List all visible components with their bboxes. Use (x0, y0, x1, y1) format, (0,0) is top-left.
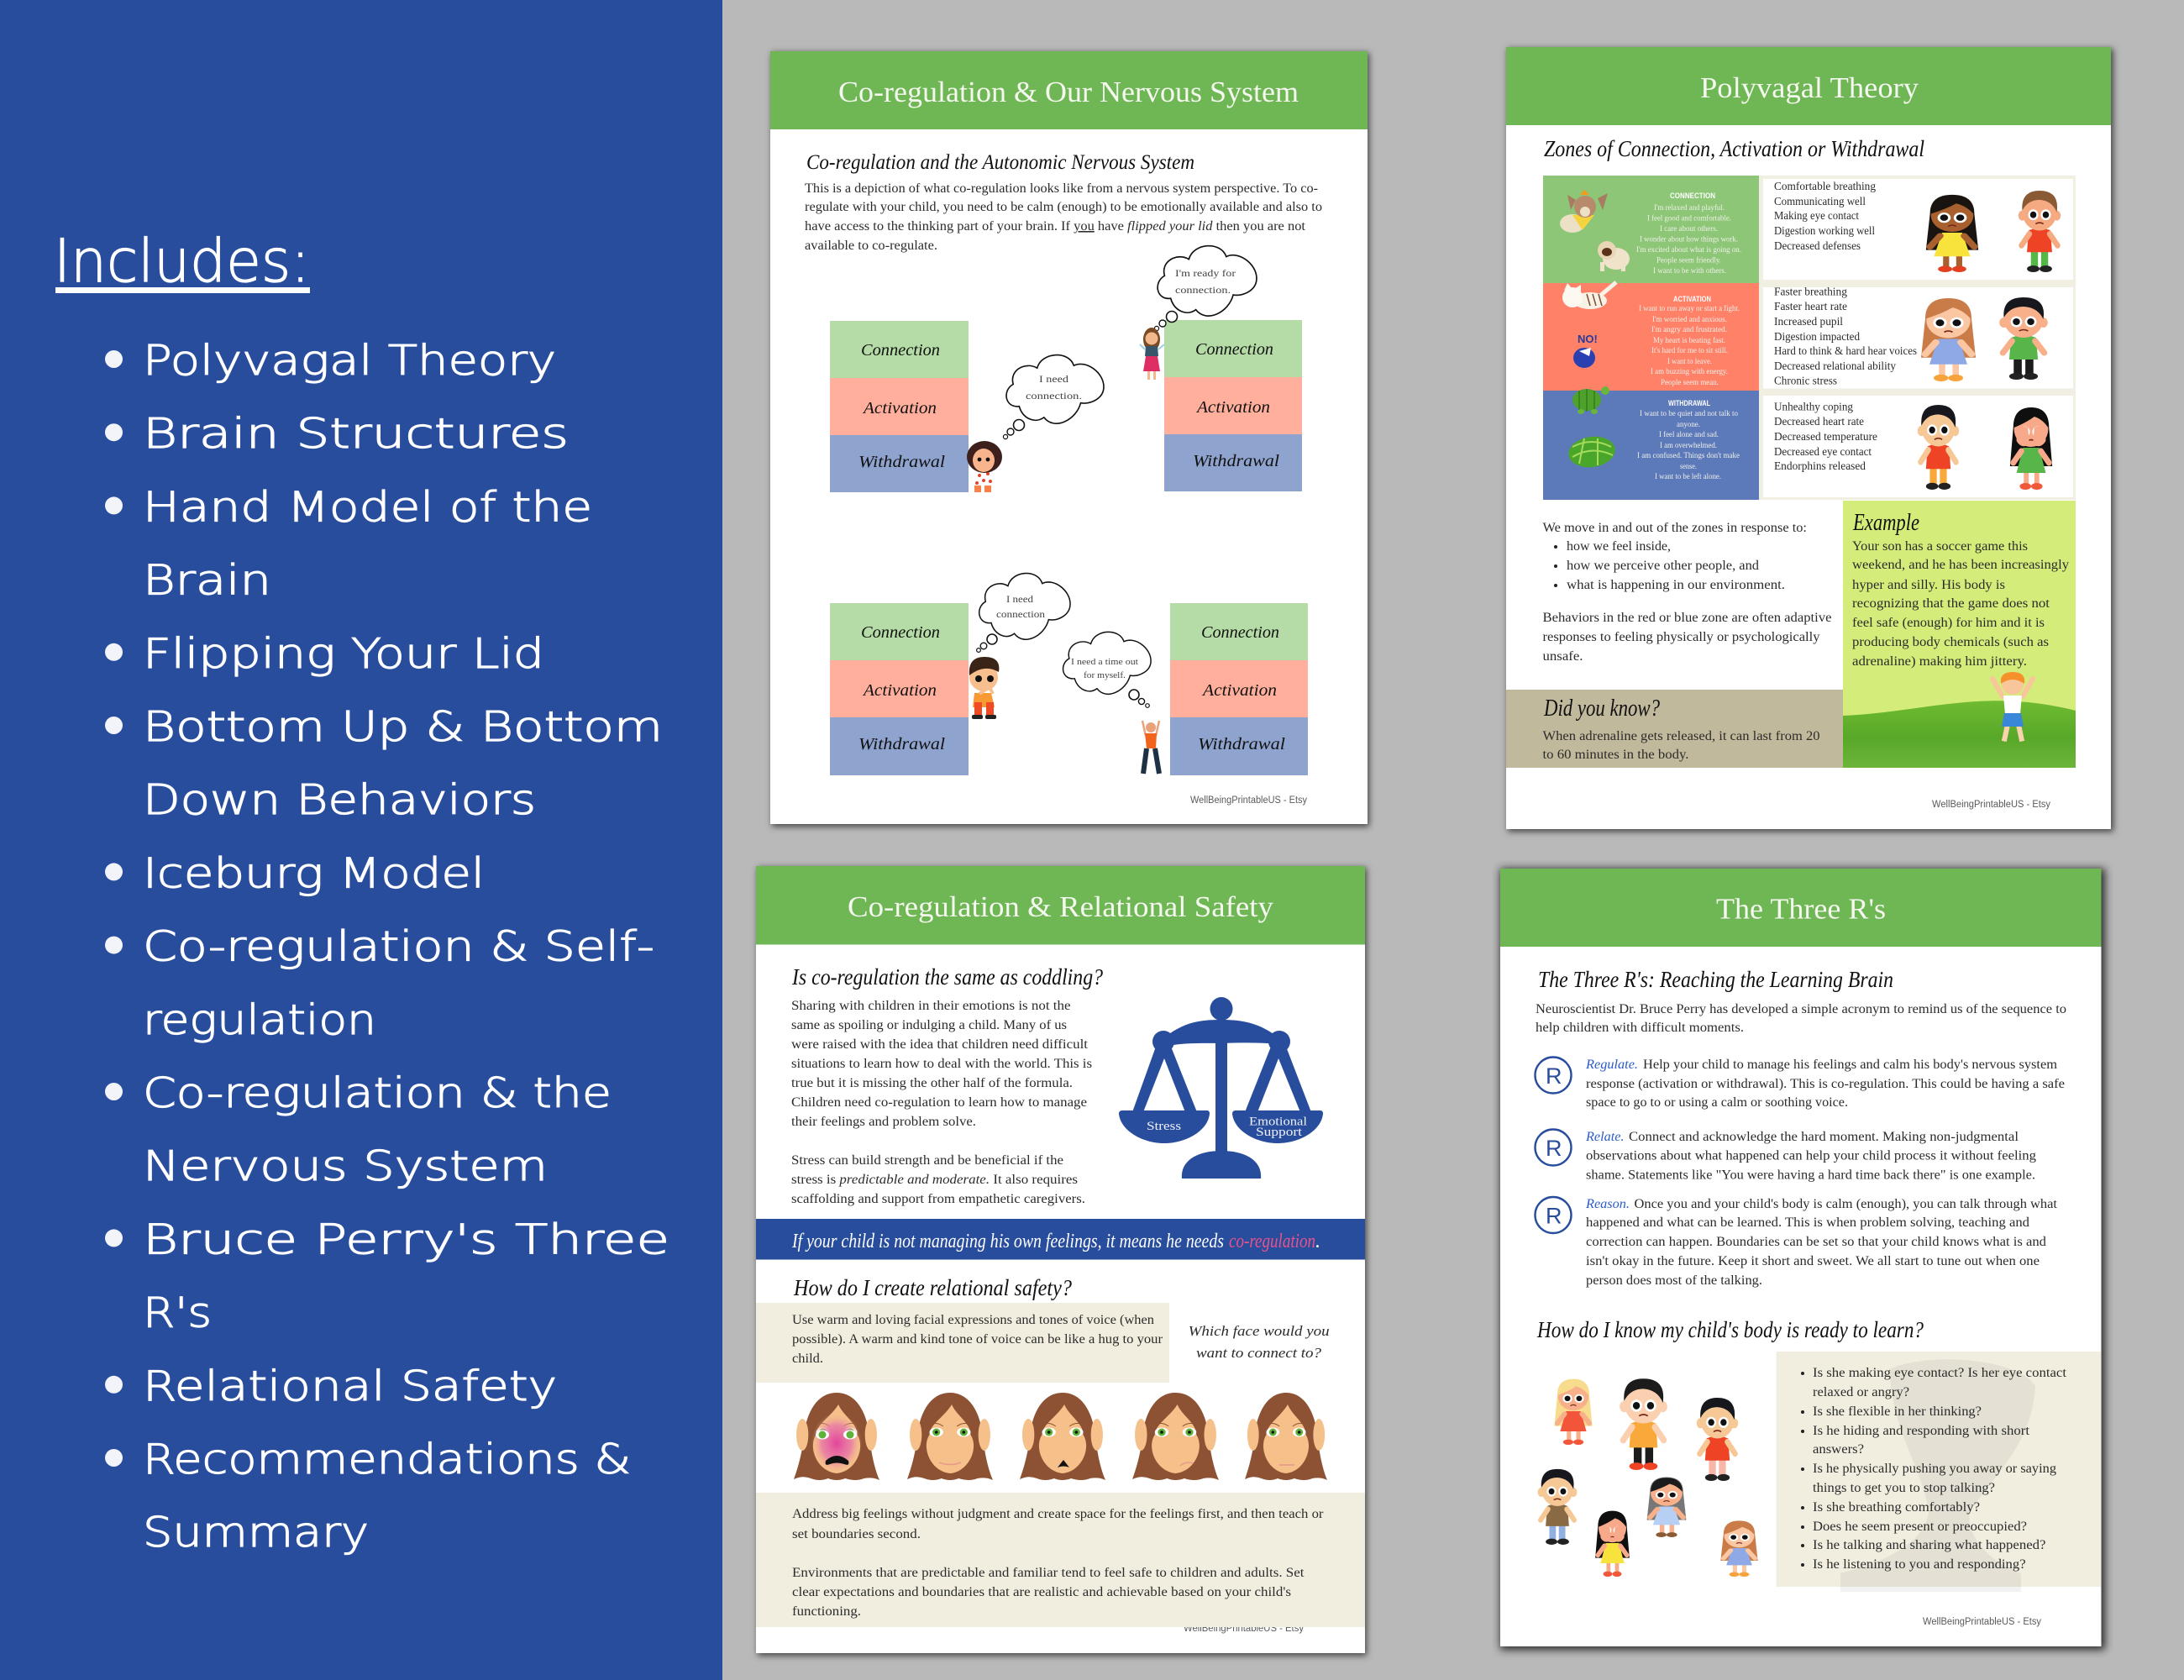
thought bubble: I need connection: I need (1006, 595, 1033, 605)
page title: Polyvagal Theory (1700, 71, 1919, 104)
readiness checklist box: Is he hiding and responding with short (1813, 1424, 2030, 1438)
zone panel: withdrawal: WITHDRAWAL (1668, 399, 1710, 408)
thought bubble: I'm ready for connection.: I'm ready for (1175, 269, 1236, 279)
question: which face (1189, 1323, 1330, 1361)
bullet list: Nervous System (143, 1142, 548, 1190)
zone panel: activation: It's hard for me to sit still. (1651, 346, 1728, 354)
zone stack: child activated: Withdrawal (858, 735, 945, 753)
bullet list: R's (143, 1289, 212, 1337)
readiness checklist box: things to get you to stop talking? (1813, 1481, 1995, 1495)
section heading: The Three R's: Reaching the Learning Brain (1538, 967, 1893, 992)
item: Regulate: R (1546, 1063, 1562, 1089)
readiness checklist box: relaxed or angry? (1813, 1385, 1909, 1399)
zone panel: activation: ACTIVATION (1673, 295, 1711, 304)
coddling paragraph: were raised with the idea that children need difficult (791, 1037, 1089, 1052)
icon: balance scale: Support (1256, 1126, 1303, 1139)
closing guidance box: Address big feelings without judgment and create space for the feelings first, and then teach or (792, 1507, 1324, 1521)
face: smirking (1132, 1393, 1219, 1480)
zone stack: adult withdrawn: Connection (1201, 623, 1279, 642)
bullet list: Down Behaviors (143, 776, 536, 824)
readiness checklist box: Is she breathing comfortably? (1813, 1500, 1980, 1515)
icon: balance scale (1119, 997, 1323, 1179)
readiness checklist box (1776, 1352, 2101, 1592)
withdrawal signs list: Unhealthy coping (1774, 401, 1853, 413)
zone panel: withdrawal (1543, 391, 1759, 500)
item: Reason: isn't okay in the future. Keep it short and sweet. We all start to tune out when one (1586, 1254, 2040, 1268)
zone stack: child activated (830, 603, 969, 775)
zone panel: connection: I feel good and comfortable. (1647, 213, 1731, 222)
bullet list: Relational Safety (143, 1362, 557, 1410)
character: woman in pink skirt (1140, 328, 1164, 380)
callout: example (1843, 501, 2076, 768)
zones explanation text: what is happening in our environment. (1567, 578, 1785, 592)
bullet list (105, 337, 669, 1557)
connection signs list: Digestion working well (1774, 224, 1875, 237)
zone panel: connection: I want to be with others. (1653, 266, 1726, 275)
icon: turtle shell (1567, 433, 1617, 470)
bullet list: Flipping Your Lid (143, 630, 544, 678)
relational safety tip box: possible). A warm and kind tone of voice can be like a hug to your (792, 1332, 1163, 1347)
zones explanation text: We move in and out of the zones in response to: (1542, 521, 1807, 535)
callout: example: recognizing that the game does not (1852, 596, 2050, 611)
bullet list: Summary (143, 1509, 369, 1557)
thought bubble: I need a time out for myself.: I need a time out (1071, 658, 1138, 667)
zones explanation text (1542, 521, 1832, 664)
key message band: co-regulation (1229, 1231, 1315, 1252)
coddling paragraph: Sharing with children in their emotions is not the (791, 999, 1071, 1013)
bullet list: Co-regulation & the (143, 1069, 612, 1117)
zone panel: activation: My heart is beating fast. (1653, 336, 1725, 344)
coddling paragraph: scaffolding and support from empathetic caregivers. (791, 1192, 1085, 1206)
callout: did you know (1506, 690, 1843, 768)
readiness checklist box: Does he seem present or preoccupied? (1813, 1520, 2027, 1534)
bullet list: Co-regulation & Self- (143, 923, 654, 971)
item: Regulate: space to go to or using a calm or soothing voice. (1586, 1095, 1848, 1110)
readiness checklist box: Is he talking and sharing what happened? (1813, 1538, 2046, 1552)
closing guidance box (756, 1493, 1365, 1627)
question: which face: want to connect to? (1196, 1345, 1322, 1361)
footer credit: WellBeingPrintableUS - Etsy (1923, 1617, 2041, 1627)
item: Regulate: response (activation or withdrawal). This is co-regulation. This could be having a safe (1586, 1077, 2065, 1091)
key message band: If your child is not managing his own feelings, it means he needs (791, 1231, 1224, 1252)
intro paragraph: help children with difficult moments. (1536, 1021, 1744, 1035)
zone panel: activation: I want to leave. (1667, 357, 1712, 365)
zone stack: child needs connection: Activation (862, 399, 937, 417)
activation signs list: Faster heart rate (1774, 300, 1847, 312)
coddling paragraph: Children need co-regulation to learn how to manage (791, 1095, 1087, 1110)
intro paragraph: regulate with your child, you need to be calm (enough) to be emotionally available and also to (805, 200, 1322, 214)
callout: example: Your son has a soccer game this (1852, 539, 2028, 554)
activation signs list: Increased pupil (1774, 315, 1843, 328)
zone panel: withdrawal: sense. (1680, 462, 1697, 470)
zone stack: adult ready for connection: Activation (1195, 398, 1270, 417)
panel: The Three R's page (1500, 869, 2105, 1650)
icon: pug (1598, 241, 1630, 271)
bullet list: Hand Model of the (143, 483, 592, 531)
connection signs list (1774, 180, 1876, 252)
zone panel: withdrawal: anyone. (1677, 420, 1700, 428)
closing guidance box: set boundaries second. (792, 1527, 921, 1541)
zone stack: child activated: Activation (862, 681, 937, 700)
thought bubble: I need a time out for myself.: for myself. (1084, 671, 1126, 680)
question: which face: Which face would you (1189, 1323, 1330, 1339)
zone panel: connection: I'm relaxed and playful. (1654, 203, 1725, 212)
withdrawal signs list: Endorphins released (1774, 459, 1866, 472)
icon: cat (1562, 282, 1616, 309)
grass hill (1843, 701, 2076, 768)
footer credit: WellBeingPrintableUS - Etsy (1932, 800, 2050, 810)
withdrawal signs list (1774, 401, 1877, 472)
bullet list: regulation (143, 996, 376, 1044)
footer credit: WellBeingPrintableUS - Etsy (1190, 795, 1307, 806)
item: Relate: observations about what happened can help your child process it without feeling (1586, 1149, 2036, 1163)
connection signs list: Decreased defenses (1774, 239, 1861, 252)
closing guidance box: functioning. (792, 1604, 861, 1619)
character: girl in polka dots (967, 441, 1002, 492)
readiness checklist box: Is she making eye contact? Is her eye contact (1813, 1366, 2067, 1380)
readiness checklist box: Is he physically pushing you away or saying (1813, 1462, 2056, 1476)
bullet list: Recommendations & (143, 1436, 631, 1483)
zone stack: child needs connection (830, 321, 969, 492)
thought bubble: I need connection.: connection. (1026, 391, 1082, 402)
icon: blue cat saying NO (1573, 333, 1598, 368)
face: shocked (1020, 1393, 1105, 1480)
bullet list: Polyvagal Theory (143, 337, 556, 385)
thought bubble: I need connection. (1003, 355, 1104, 439)
withdrawal signs list: Decreased eye contact (1774, 445, 1872, 458)
zones explanation text: responses to feeling physically or psychologically (1542, 630, 1820, 644)
relational safety tip box (756, 1303, 1169, 1383)
children illustration group (1538, 1378, 1758, 1577)
symptoms frame (1759, 176, 2076, 500)
watermark: tornado (1840, 1359, 2035, 1592)
coddling paragraph: their feelings and problem solve. (791, 1115, 976, 1129)
zone panel: activation: I'm worried and anxious. (1652, 315, 1727, 323)
callout: example: producing body chemicals (such as (1852, 635, 2049, 649)
section heading: How do I know my child's body is ready to learn? (1536, 1317, 1924, 1342)
item: Regulate (1536, 1057, 2065, 1110)
face: smiling (907, 1393, 993, 1480)
thought bubble: I'm ready for connection. (1154, 246, 1257, 331)
item: Relate: Connect and acknowledge the hard moment. Making non-judgmental (1629, 1130, 2019, 1144)
intro paragraph: This is a depiction of what co-regulation looks like from a nervous system perspective. To co- (805, 181, 1318, 196)
callout: did you know: to 60 minutes in the body. (1542, 748, 1688, 762)
zone stack: adult ready for connection (1164, 320, 1302, 491)
item: Reason: person does most of the talking. (1586, 1273, 1762, 1288)
withdrawal signs list: Decreased heart rate (1774, 415, 1864, 428)
item: Reason: R (1546, 1203, 1562, 1228)
section heading: How do I create relational safety? (793, 1275, 1072, 1300)
item: Reason: Reason. (1585, 1197, 1630, 1211)
coddling paragraph: true but it is missing the other half of the formula. (791, 1076, 1073, 1090)
zone panel: connection: I'm excited about what is going on. (1636, 245, 1741, 254)
zone panel: connection: CONNECTION (1670, 192, 1715, 201)
closing guidance box: Environments that are predictable and familiar tend to feel safe to children and adults. Set (792, 1566, 1305, 1580)
activation signs list (1774, 286, 1917, 386)
zone panel: withdrawal: I want to be left alone. (1655, 472, 1721, 480)
panel: Co-regulation & Our Nervous System page (770, 51, 1369, 827)
readiness checklist box: Is he listening to you and responding? (1813, 1557, 2026, 1572)
coddling paragraph: Stress can build strength and be beneficial if the (791, 1153, 1063, 1168)
item: Reason (1536, 1197, 2058, 1288)
thought bubble: I need connection.: I need (1039, 375, 1068, 385)
icon: balance scale: Stress (1147, 1120, 1181, 1133)
connection signs list: Making eye contact (1774, 209, 1859, 222)
item: Regulate: Help your child to manage his feelings and calm his body's nervous system (1643, 1058, 2057, 1072)
bullet list: Bottom Up & Bottom (143, 703, 663, 751)
section heading: Co-regulation and the Autonomic Nervous System (806, 151, 1194, 174)
thought bubble: I need connection (977, 574, 1070, 652)
character: boy with sunglasses (969, 657, 999, 719)
intro paragraph: available to co-regulate. (805, 239, 937, 253)
coddling paragraph: same as spoiling or indulging a child. Many of us (791, 1018, 1067, 1032)
callout: example: feel safe (enough) for him and it is (1852, 616, 2045, 630)
icon: dog (1560, 190, 1608, 233)
zone panel: withdrawal: I am confused. Things don't make (1637, 451, 1740, 459)
zone stack: adult ready for connection: Connection (1195, 340, 1273, 359)
closing guidance box: clear expectations and boundaries that are realistic and achievable based on your child's (792, 1585, 1291, 1599)
zone panel: withdrawal: I am overwhelmed. (1660, 441, 1717, 449)
activation signs list: Faster breathing (1774, 286, 1847, 297)
zones explanation text: how we perceive other people, and (1567, 559, 1759, 573)
zone panel: connection: People seem friendly. (1656, 255, 1721, 264)
item: Relate: R (1546, 1136, 1562, 1161)
heading: Includes: Includes: (54, 227, 310, 296)
zone panel: activation: People seem mean. (1661, 378, 1719, 386)
thought bubble: I need connection: connection (996, 610, 1045, 620)
zone panel: connection (1543, 176, 1759, 283)
page title: The Three R's (1716, 892, 1886, 926)
zone stack: adult withdrawn: Activation (1201, 681, 1277, 700)
zone panel: connection: I wonder about how things work. (1640, 235, 1738, 244)
zones explanation text: Behaviors in the red or blue zone are often adaptive (1542, 611, 1832, 625)
panel: Co-regulation & Relational Safety page (756, 866, 1367, 1656)
bullet list: Iceburg Model (143, 849, 485, 897)
activation signs list: Decreased relational ability (1774, 360, 1896, 372)
coddling paragraph (791, 999, 1092, 1206)
callout: example: Example (1852, 509, 1919, 536)
item: Relate: shame. Statements like "You were having a hard time back there" is one example. (1586, 1168, 2035, 1183)
bullet list: Bruce Perry's Three (143, 1215, 669, 1263)
zone stack: adult withdrawn (1170, 603, 1308, 775)
zone panel: withdrawal: I want to be quiet and not talk to (1640, 409, 1738, 417)
connection signs list: Comfortable breathing (1774, 180, 1876, 192)
intro paragraph: Neuroscientist Dr. Bruce Perry has developed a simple acronym to remind us of the sequence to (1536, 1002, 2066, 1016)
zone panel: activation: I am buzzing with energy. (1651, 367, 1728, 375)
item: Relate (1536, 1129, 2036, 1183)
page title: Co-regulation & Our Nervous System (838, 76, 1299, 108)
callout: did you know: Did you know? (1543, 695, 1660, 722)
readiness checklist box: Is she flexible in her thinking? (1813, 1404, 1982, 1419)
panel: includes list (0, 0, 722, 1680)
zone stack: child needs connection: Connection (861, 341, 940, 360)
zone panel: withdrawal: I feel alone and sad. (1659, 430, 1719, 438)
zone stack: adult withdrawn: Withdrawal (1198, 735, 1285, 753)
coddling paragraph: situations to learn how to deal with the world. This is (791, 1057, 1092, 1071)
key message band: . (1315, 1231, 1320, 1252)
icon: blue cat saying NO: NO! (1578, 333, 1598, 345)
faces row (794, 1393, 1327, 1480)
key message band (756, 1219, 1365, 1260)
intro paragraph: have access to the thinking part of your brain. If you have flipped your lid then you are not (805, 219, 1306, 234)
zone panel: activation: I'm angry and frustrated. (1651, 325, 1727, 333)
page title: Co-regulation & Relational Safety (848, 890, 1274, 923)
zones explanation text: how we feel inside, (1567, 539, 1671, 554)
icon: balance scale: Emotional (1249, 1116, 1307, 1129)
relational safety tip box: child. (792, 1352, 823, 1366)
item: Reason: happened and what can be learned. This is when problem solving, teaching and (1586, 1215, 2029, 1230)
zone stack: child needs connection: Withdrawal (858, 453, 945, 471)
readiness checklist box: answers? (1813, 1442, 1864, 1457)
face: angry (794, 1393, 879, 1480)
section heading: Zones of Connection, Activation or Withdrawal (1544, 136, 1924, 161)
relational safety tip box: Use warm and loving facial expressions and tones of voice (when (792, 1313, 1154, 1327)
item: Reason: Once you and your child's body is calm (enough), you can talk through what (1635, 1197, 2058, 1211)
face: neutral (1245, 1393, 1327, 1480)
thought bubble: I need a time out for myself. (1063, 632, 1151, 707)
callout: did you know: When adrenaline gets released, it can last from 20 (1542, 729, 1820, 743)
zone panel: activation: I want to run away or start a fight. (1639, 304, 1740, 312)
zones explanation text: unsafe. (1542, 649, 1583, 664)
section heading: Is co-regulation the same as coddling? (791, 964, 1103, 990)
connection signs list: Communicating well (1774, 195, 1866, 207)
children illustrations by zone (1918, 191, 2061, 490)
callout: example: weekend, and he has been increasingly (1852, 558, 2069, 572)
zone stack: child activated: Connection (861, 623, 940, 642)
zone stack: adult ready for connection: Withdrawal (1193, 452, 1279, 470)
activation signs list: Chronic stress (1774, 375, 1837, 386)
item: Relate: Relate. (1585, 1130, 1625, 1144)
callout: example: adrenaline) making him jittery. (1852, 654, 2027, 669)
panel: Polyvagal Theory page (1506, 47, 2113, 832)
intro paragraph (805, 181, 1322, 253)
character: man with hands on head (1142, 721, 1159, 774)
activation signs list: Hard to think & hard hear voices (1774, 344, 1917, 357)
withdrawal signs list: Decreased temperature (1774, 430, 1877, 443)
zone panel: activation (1543, 283, 1759, 391)
icon: turtle (1572, 386, 1609, 414)
item: Reason: correction can happen. Boundaries can be set so that your child knows what is and (1586, 1235, 2046, 1249)
bullet list: Brain Structures (143, 410, 569, 458)
bullet list: Brain (143, 557, 271, 605)
item: Regulate: Regulate. (1585, 1058, 1638, 1072)
intro paragraph (1536, 1002, 2066, 1035)
coddling paragraph: stress is predictable and moderate. It also requires (791, 1173, 1078, 1187)
zone panel: connection: I care about others. (1660, 224, 1718, 233)
footer credit, partly covered: WellBeingPrintableUS - Etsy (1184, 1624, 1304, 1634)
thought bubble: I'm ready for connection.: connection. (1175, 286, 1231, 296)
callout: example: hyper and silly. His body is (1852, 578, 2005, 592)
character: jumping boy (1992, 672, 2033, 742)
activation signs list: Digestion impacted (1774, 330, 1860, 343)
